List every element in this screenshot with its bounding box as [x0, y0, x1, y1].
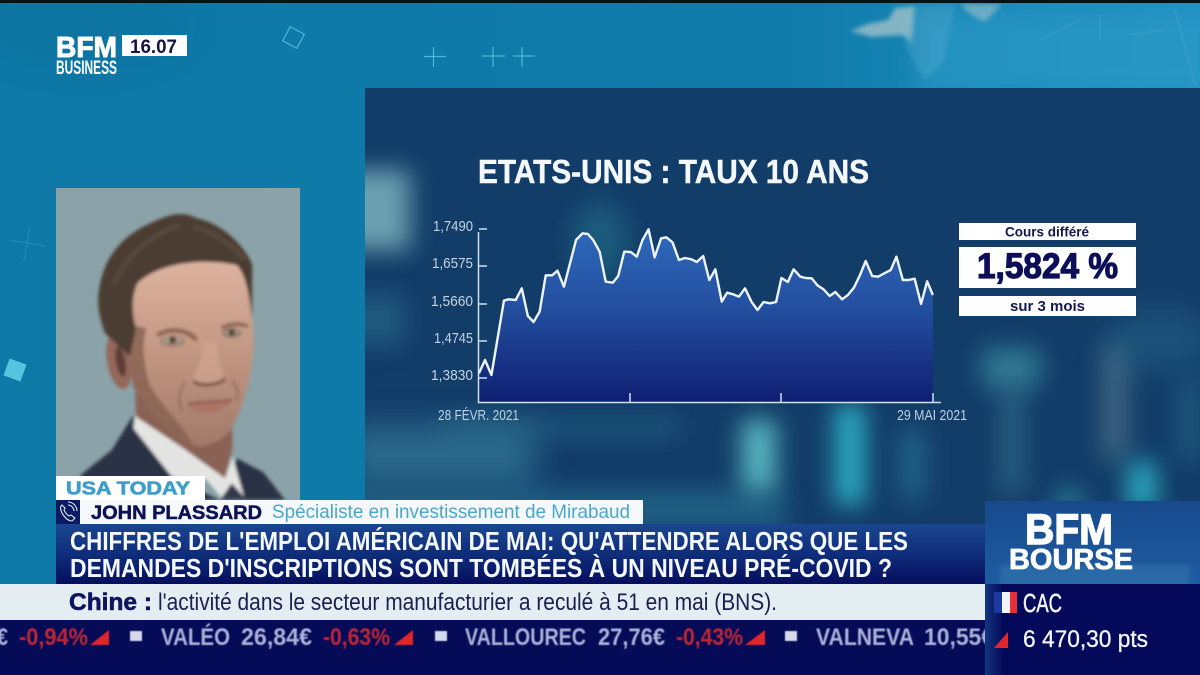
stock ticker	[0, 620, 994, 675]
stock ticker: 10,55€	[924, 624, 994, 651]
headline: DEMANDES D'INSCRIPTIONS SONT TOMBÉES À UN NIVEAU PRÉ-COVID ?	[70, 554, 892, 583]
stock ticker: -0,63%	[323, 624, 390, 651]
y axis labels: 1,5660	[431, 293, 473, 310]
index panel: CAC	[985, 584, 1200, 675]
nose	[194, 340, 224, 383]
logo: BFM Bourse: BFM	[1025, 506, 1113, 554]
headline: CHIFFRES DE L'EMPLOI AMÉRICAIN DE MAI: QU'ATTENDRE ALORS QUE LES	[70, 527, 908, 556]
shirt	[133, 415, 245, 500]
hair	[98, 214, 252, 357]
y axis labels: 1,7490	[433, 218, 473, 235]
y axis labels: 1,6575	[432, 255, 473, 272]
stock ticker: VALLOUREC	[465, 624, 586, 651]
brows and eyes	[157, 330, 197, 340]
index panel: CAC: 6 470,30 pts	[1023, 626, 1148, 653]
panel: chart background	[335, 88, 1200, 530]
logo: BFM Business	[56, 32, 117, 79]
ear	[104, 336, 134, 390]
world map texture	[0, 0, 1200, 95]
y axis labels	[431, 218, 473, 384]
tag: USA TODAY: USA TODAY	[66, 478, 190, 498]
title: ETATS-UNIS : TAUX 10 ANS	[478, 154, 869, 191]
y axis labels: 1,3830	[431, 367, 473, 384]
tag: USA TODAY	[56, 476, 205, 500]
quote box: 1,5824 %	[977, 247, 1118, 286]
icon: down triangle	[994, 632, 1008, 648]
area chart: 10-year yield: 29 MAI 2021	[897, 408, 967, 424]
cheek lines	[179, 380, 238, 412]
clock: 16.07	[130, 36, 177, 58]
stock ticker: VALÉO	[161, 623, 230, 651]
area and line	[479, 229, 933, 402]
stock ticker: VALNEVA	[816, 624, 914, 651]
portrait photo	[56, 188, 300, 500]
tie	[220, 483, 245, 500]
stock ticker: -0,94%	[19, 624, 88, 651]
mouth	[190, 400, 230, 412]
icon: French flag	[994, 592, 1017, 613]
quote box: sur 3 mois	[1010, 298, 1085, 315]
speaker name bar	[56, 500, 643, 524]
stock ticker: 26,84€	[241, 624, 312, 651]
logo: BFM Business: BUSINESS	[56, 57, 117, 79]
logo: BFM Business: BFM	[56, 32, 117, 64]
speaker name bar: JOHN PLASSARD	[91, 502, 262, 524]
quote box	[959, 223, 1136, 316]
headline	[56, 524, 985, 584]
logo: BFM Bourse	[985, 501, 1200, 585]
quote box: Cours différé	[1005, 224, 1089, 240]
y axis labels: 1,4745	[434, 330, 473, 347]
stock ticker: -0,43%	[676, 624, 743, 651]
news strip	[0, 584, 985, 620]
neck	[135, 392, 233, 478]
logo: BFM Bourse: BOURSE	[1009, 544, 1133, 576]
x axis labels: 28 FÉVR. 2021	[438, 407, 519, 424]
suit	[81, 415, 285, 500]
decorative icons	[3, 27, 535, 382]
area chart: 10-year yield	[431, 218, 967, 424]
news strip: Chine :	[69, 589, 152, 616]
news strip: l'activité dans le secteur manufacturier a reculé à 51 en mai (BNS).	[158, 589, 777, 616]
face	[130, 261, 254, 446]
axes	[478, 229, 941, 402]
speaker name bar: Spécialiste en investissement de Mirabaud	[272, 501, 630, 523]
face side shadow	[131, 325, 193, 445]
stock ticker: 27,76€	[598, 624, 665, 651]
index panel: CAC: CAC	[1023, 588, 1062, 618]
icon: phone	[56, 500, 80, 524]
